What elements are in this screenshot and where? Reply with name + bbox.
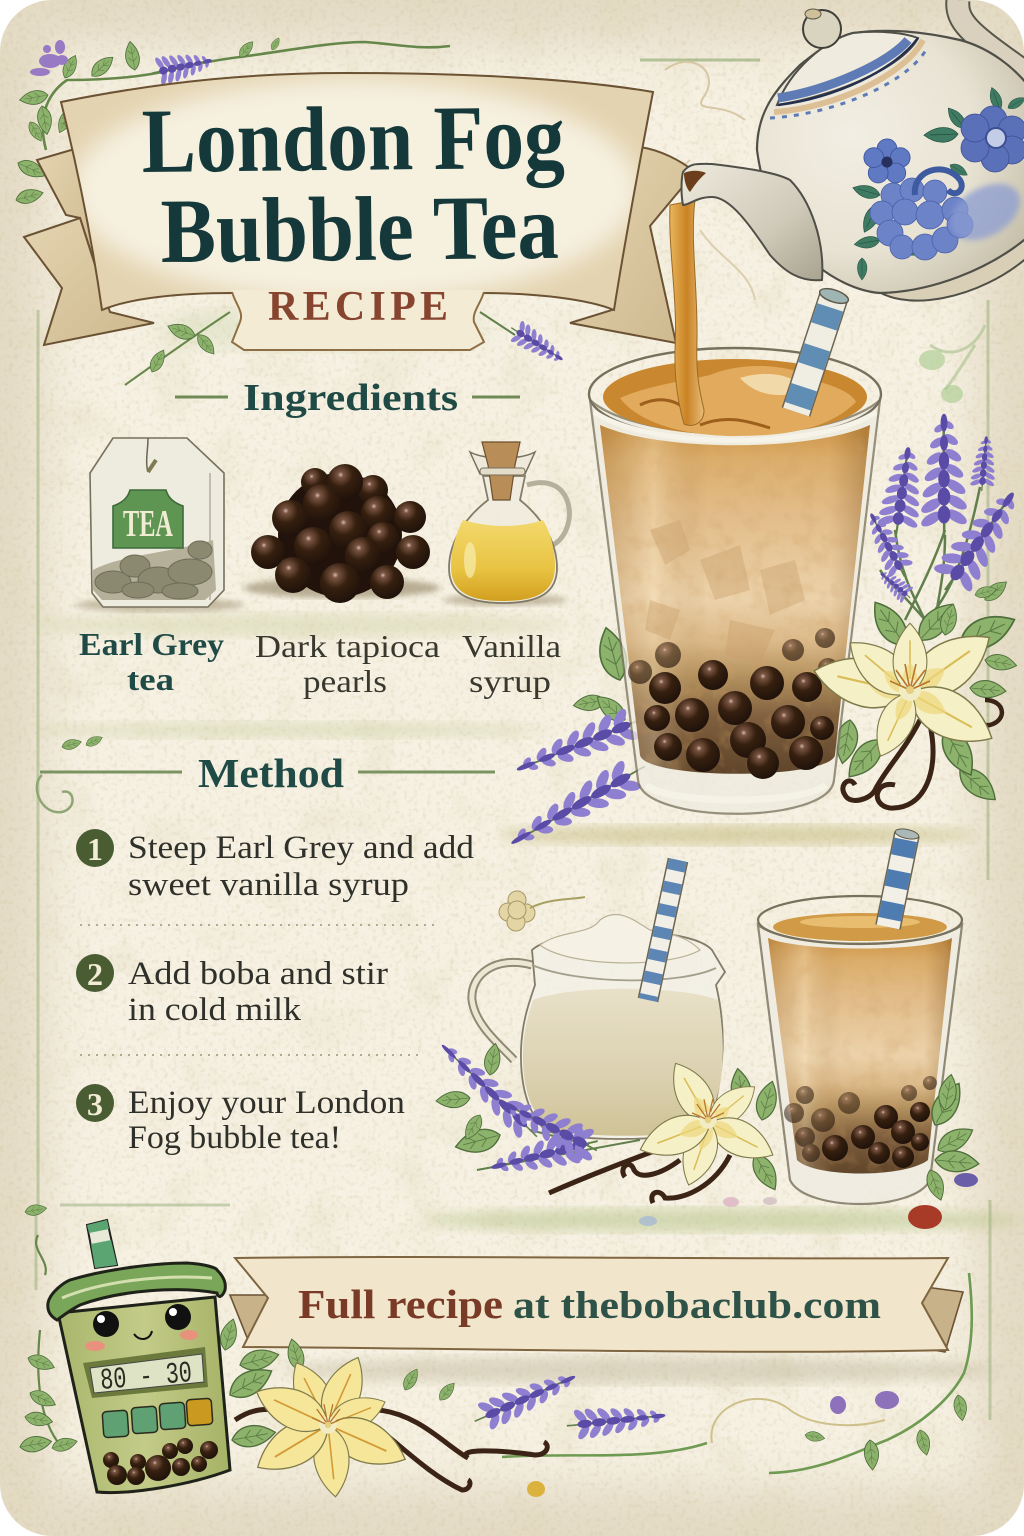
label: Vanilla syrup — [462, 628, 561, 699]
vanilla flower and pods beside big cup — [809, 618, 1003, 808]
bottom floral garland — [19, 1203, 972, 1499]
large bubble tea cup — [589, 286, 881, 814]
large cup straw — [796, 286, 850, 412]
label: Earl Grey tea: tea — [127, 661, 174, 697]
kawaii calculator boba cup mascot — [48, 1220, 230, 1493]
botanicals around pitcher and small cup — [431, 1034, 980, 1229]
ingredient labels — [79, 626, 561, 699]
ingredient: tapioca pearls — [244, 464, 440, 603]
mascot lid — [48, 1263, 225, 1320]
pitcher straw — [648, 860, 678, 1000]
teapot spout — [682, 164, 822, 280]
banner left tail upper — [36, 149, 92, 252]
label: Vanilla syrup: Vanilla — [462, 628, 561, 664]
small sprigs under banner — [125, 312, 570, 385]
lid blue band — [778, 40, 908, 98]
ingredient: vanilla syrup bottle — [443, 442, 569, 606]
kawaii calculator boba cup mascot: 80 - 30 — [99, 1357, 194, 1399]
recipe label: RECIPE — [268, 284, 448, 330]
footer call-to-action text: at thebobaclub.com — [513, 1284, 881, 1327]
mascot straw — [87, 1220, 117, 1268]
mascot face — [85, 1304, 198, 1351]
dried flower near pitcher — [499, 891, 585, 931]
tea pour stream — [670, 200, 704, 425]
mascot boba pearls — [103, 1438, 218, 1485]
teapot knob — [803, 9, 841, 48]
step 3 — [76, 1084, 405, 1156]
step 2 — [76, 954, 388, 1028]
label: Earl Grey tea: Earl Grey — [79, 626, 224, 662]
label: Earl Grey tea — [80, 633, 224, 690]
banner right tail — [570, 147, 695, 343]
step 2: Add boba and stir — [128, 956, 388, 992]
method heading — [37, 733, 495, 812]
porcelain teapot — [682, 0, 1024, 301]
title text line two: Bubble Tea — [160, 176, 559, 282]
step 1: Steep Earl Grey and add — [128, 830, 475, 866]
ingredient: tea bag — [75, 438, 245, 612]
large cup rim — [589, 348, 881, 440]
tea tag — [113, 490, 183, 548]
small bubble tea cup — [758, 827, 962, 1204]
footer recipe banner — [230, 1257, 963, 1352]
title text: London Fog — [141, 86, 565, 192]
step 2: in cold milk — [128, 992, 302, 1028]
banner main scroll — [61, 73, 653, 310]
mascot calculator display — [83, 1347, 208, 1398]
step 3: Fog bubble tea! — [128, 1120, 341, 1156]
boba pearls in large cup — [628, 628, 838, 779]
step 3: 3 — [87, 1086, 103, 1122]
label: Dark tapioca pearls: pearls — [303, 663, 387, 699]
purple blossom — [30, 40, 68, 76]
footer call-to-action text: Full recipe — [298, 1281, 503, 1327]
lid tan rim — [774, 40, 923, 112]
botanicals behind big cup — [502, 414, 1024, 860]
banner left tail lower — [24, 218, 154, 345]
teapot body — [757, 31, 1024, 293]
hydrangea — [870, 178, 973, 260]
method steps — [76, 829, 475, 1156]
boba pearls in small cup — [784, 1076, 937, 1168]
step 1 — [76, 829, 475, 903]
step 2: 2 — [87, 956, 103, 992]
footer call-to-action text — [298, 1281, 881, 1327]
foam surface — [603, 359, 867, 435]
recipe plaque — [232, 290, 484, 350]
method heading: Method — [198, 750, 344, 796]
large blue blossom right — [961, 106, 1024, 172]
ingredient: tea bag: TEA — [123, 503, 173, 545]
mascot keypad — [102, 1398, 213, 1438]
teapot blue floral decor — [851, 86, 1024, 280]
label: Dark tapioca pearls: Dark tapioca — [255, 628, 440, 664]
top-left vine with lavender — [14, 36, 450, 206]
teapot handle — [958, 0, 1024, 76]
step 1: sweet vanilla syrup — [128, 867, 409, 903]
label: Dark tapioca pearls — [255, 628, 440, 699]
milk pitcher — [472, 860, 725, 1139]
step 3: Enjoy your London — [128, 1085, 405, 1121]
label: Vanilla syrup: syrup — [469, 663, 551, 699]
title banner — [24, 73, 695, 350]
teapot lid — [777, 32, 918, 105]
small cup straw — [888, 827, 920, 927]
mascot cup body — [58, 1297, 230, 1493]
teapot foot ring — [870, 225, 1024, 301]
step 1: 1 — [87, 831, 103, 867]
ingredients heading: Ingredients — [243, 377, 458, 419]
